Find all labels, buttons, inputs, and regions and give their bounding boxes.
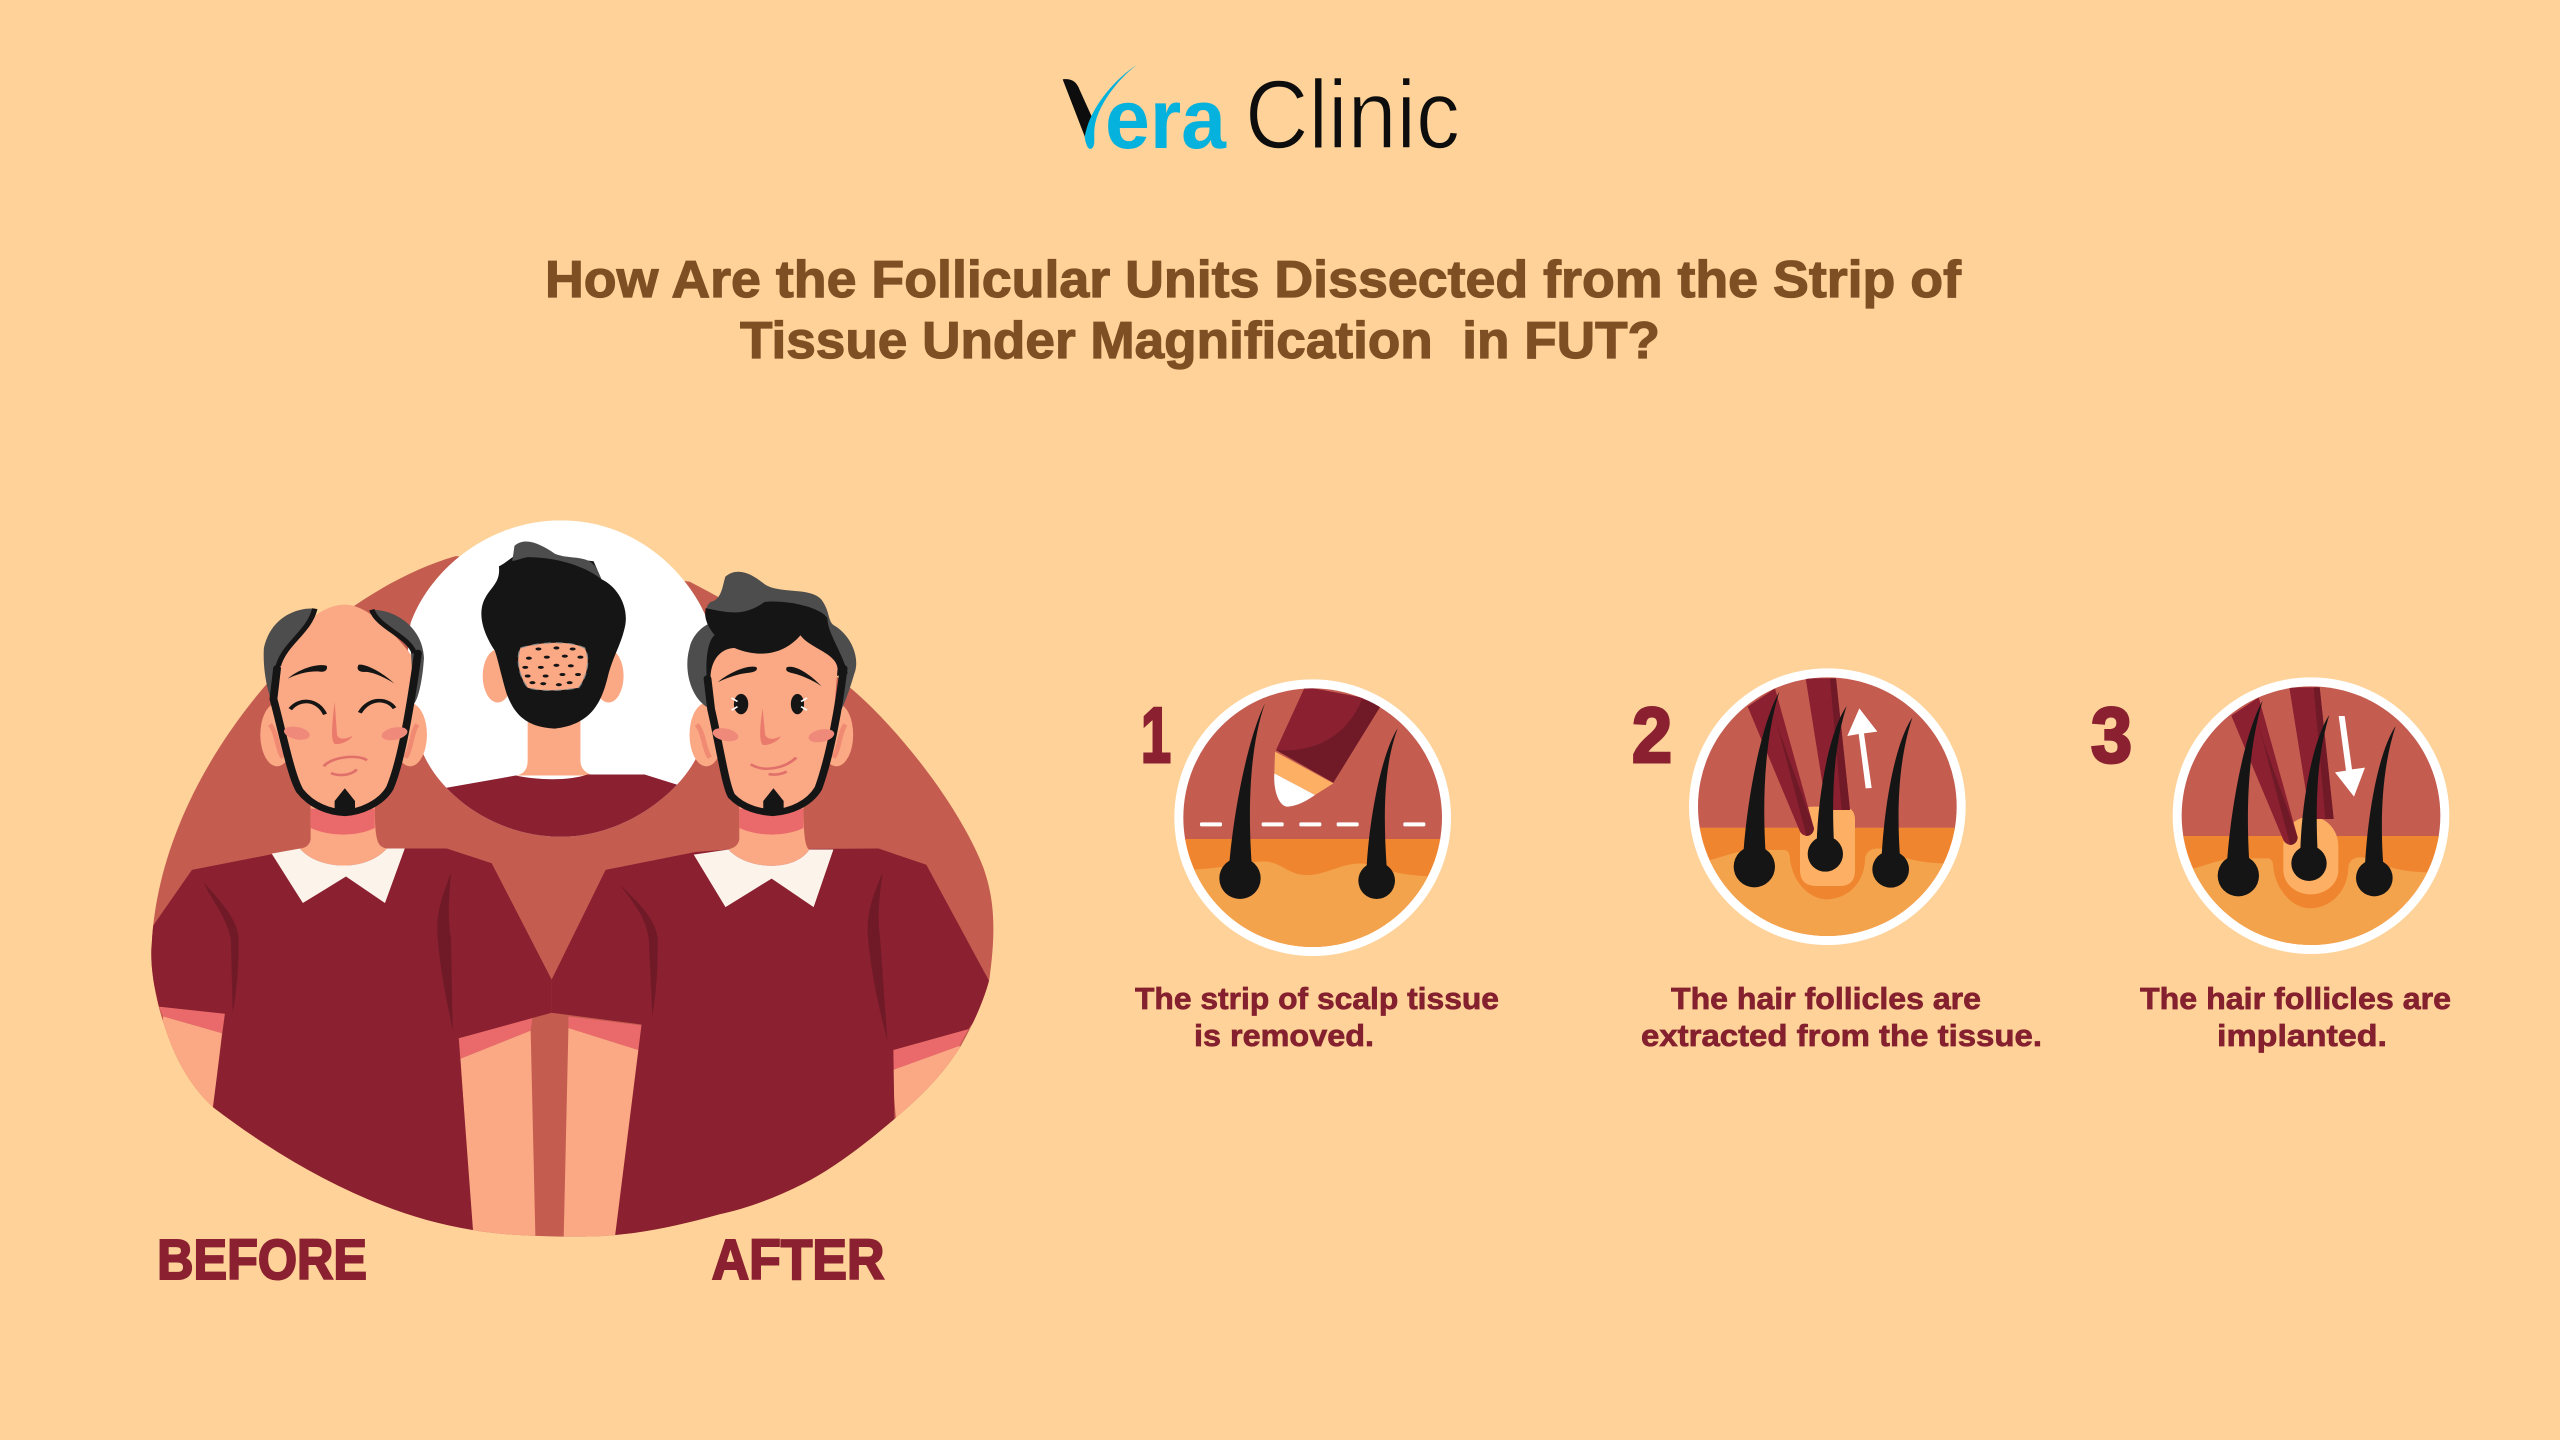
- logo: Vera Clinic: [1063, 60, 1460, 169]
- step 2 number: 2: [1632, 691, 1672, 779]
- left figure body: before: [144, 848, 552, 1240]
- step 1 caption: The strip of scalp tissue: [1135, 981, 1499, 1016]
- right figure neck and collar: [694, 806, 833, 907]
- right figure head: full hair: [687, 572, 856, 814]
- step 3 number: 3: [2091, 691, 2132, 779]
- center figure: donor area on back of head: [408, 520, 708, 837]
- logo word: era: era: [1105, 72, 1227, 166]
- logo mark: V: [1063, 65, 1137, 149]
- step 2 icon: follicle extraction: [1689, 668, 1966, 945]
- step 1 caption: [1135, 981, 1499, 1053]
- left figure neck and collar: [272, 806, 405, 903]
- step 2 caption: The hair follicles are: [1671, 981, 1981, 1016]
- left figure head: balding: [260, 605, 427, 814]
- step 3 caption: implanted.: [2217, 1018, 2387, 1053]
- background blob: [151, 556, 993, 1237]
- right figure body: after: [552, 848, 995, 1240]
- title: Tissue Under Magnification in FUT?: [740, 312, 1660, 370]
- step 3 icon: follicle implantation: [2173, 677, 2449, 954]
- step 2 caption: extracted from the tissue.: [1641, 1018, 2042, 1053]
- label: AFTER: AFTER: [712, 1229, 884, 1291]
- step 2 caption: [1641, 981, 2042, 1053]
- step 3 caption: [2140, 981, 2451, 1053]
- title: How Are the Follicular Units Dissected from the Strip of: [545, 251, 1962, 309]
- illustration: before and after men: [144, 515, 995, 1291]
- step 1 number: 1: [1141, 691, 1171, 779]
- step 3 caption: The hair follicles are: [2140, 981, 2451, 1016]
- title: [545, 251, 1962, 370]
- logo word: Clinic: Clinic: [1245, 60, 1460, 169]
- step 1 caption: is removed.: [1194, 1018, 1374, 1053]
- label: BEFORE: BEFORE: [157, 1229, 367, 1291]
- step 1 icon: strip removal: [1174, 679, 1451, 956]
